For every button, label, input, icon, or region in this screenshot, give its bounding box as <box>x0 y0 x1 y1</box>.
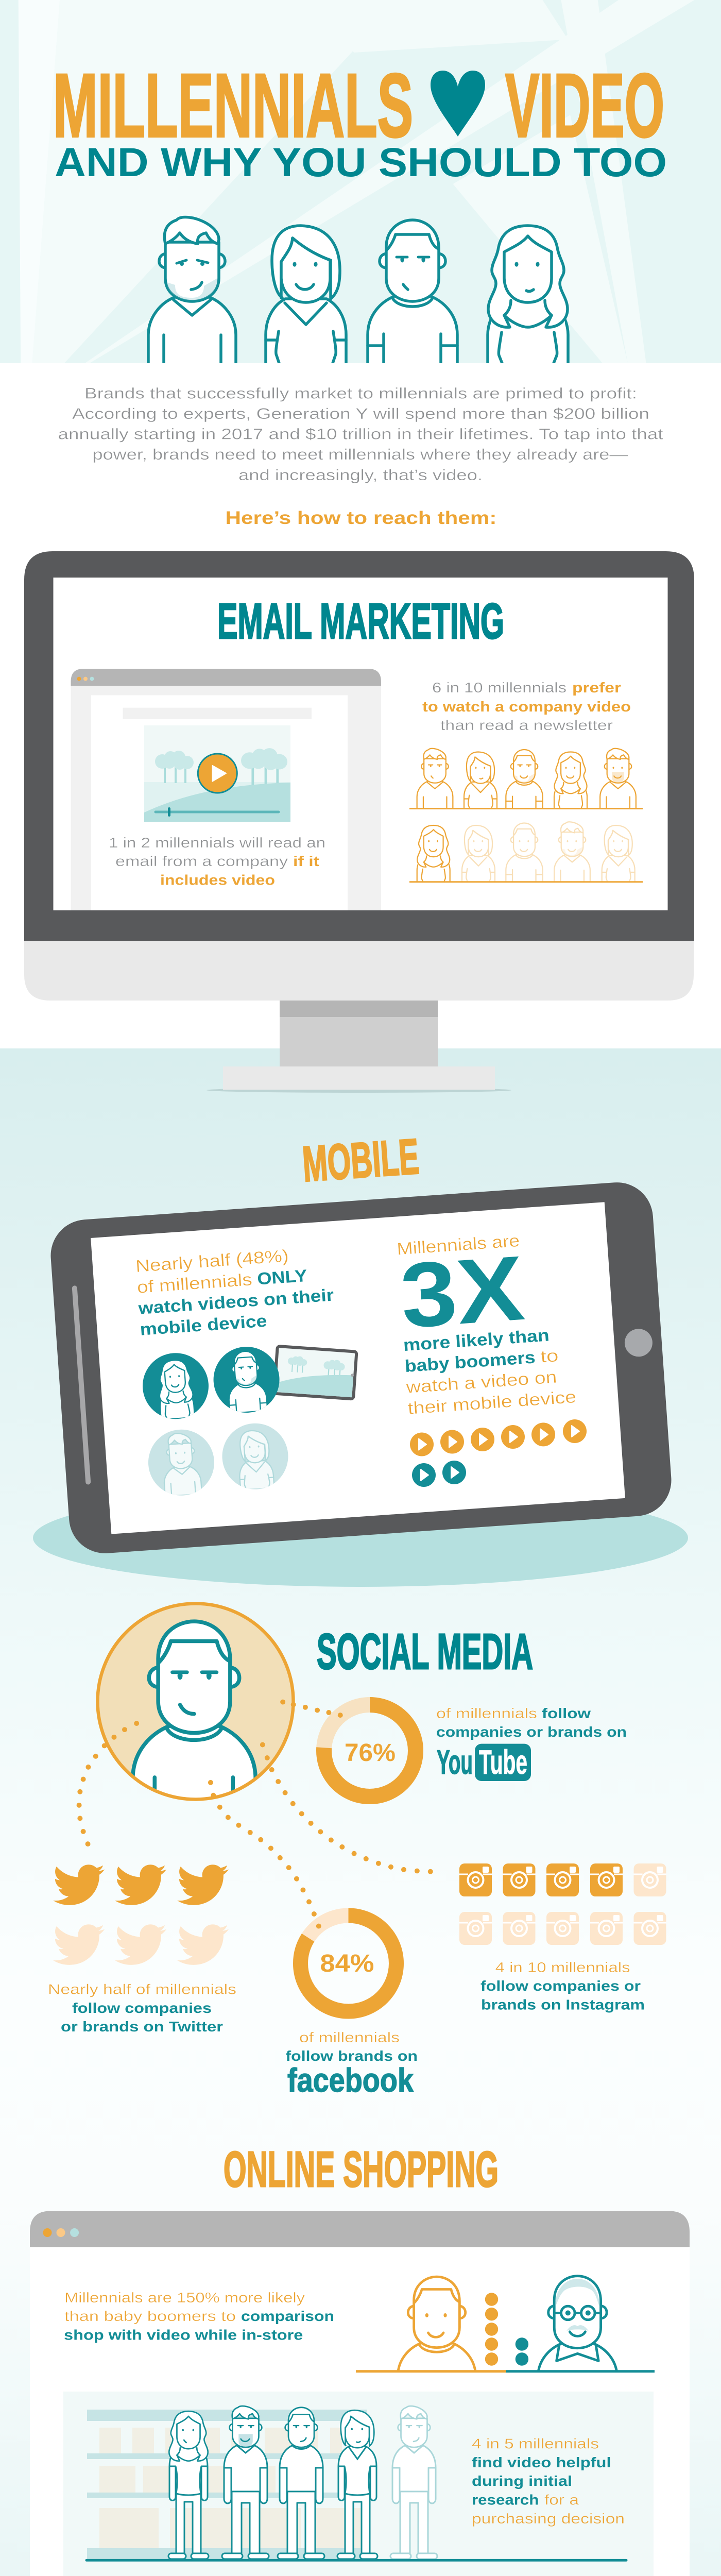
stat: comparison shop in-store: than baby boomers to <box>64 2308 236 2324</box>
stat: 4 in 5 <box>472 2436 625 2527</box>
heading: Social Media: SOCIAL MEDIA <box>317 1623 533 1680</box>
stat: 4 in 5: for a <box>544 2492 579 2508</box>
stat: 1 in 2: email from a company <box>115 853 288 869</box>
stat: comparison shop in-store <box>64 2290 334 2343</box>
header background with light rays <box>0 0 721 363</box>
panel: tablet mobile <box>48 1180 674 1556</box>
millennial circles <box>140 1344 290 1498</box>
icon: heart <box>431 71 485 137</box>
stat: Twitter: Nearly half of millennials <box>48 1981 236 1997</box>
donut chart: 84% <box>301 1916 397 2011</box>
stat: Twitter <box>48 1981 236 2035</box>
donut chart: 84%: 84% <box>320 1950 374 1977</box>
stat: Instagram: brands on Instagram <box>481 1997 645 2012</box>
shelf boxes <box>99 2428 361 2548</box>
small tablet video <box>274 1346 356 1399</box>
stat: 6 in 10: 6 in 10 millennials <box>432 680 566 696</box>
people rows: 6 of 10 <box>409 749 643 882</box>
browser window email mock <box>71 669 381 910</box>
monitor screen <box>54 578 667 910</box>
stat: YouTube: of millennials <box>436 1705 537 1721</box>
title: Millennials love video: MILLENNIALS <box>53 56 413 156</box>
stat: nearly half: of millennials <box>136 1269 253 1297</box>
stat: 3X: more likely than <box>403 1325 550 1354</box>
stat: 1 in 2: if it <box>293 853 319 869</box>
stat: YouTube <box>436 1705 627 1781</box>
logo: YouTube: You <box>437 1743 473 1781</box>
stat: 4 in 5: during initial <box>472 2473 572 2489</box>
tablet frame <box>48 1180 674 1556</box>
icon: millennial vs boomer comparison <box>356 2275 655 2373</box>
stat: 3X: watch a video on <box>405 1367 557 1397</box>
stat: nearly half: Nearly half (48%) <box>135 1246 289 1276</box>
play icons: 3X row <box>410 1419 587 1487</box>
subtitle: AND WHY YOU SHOULD TOO <box>55 139 667 185</box>
heading: Email Marketing: EMAIL MARKETING <box>217 593 504 649</box>
stat: 6 in 10: prefer <box>572 680 621 696</box>
stat: 1 in 2 <box>109 835 325 888</box>
stat: Instagram: 4 in 10 millennials <box>495 1959 630 1975</box>
stat: comparison shop in-store: Millennials are 150% more likely <box>64 2290 305 2306</box>
stat: 4 in 5: find video helpful <box>472 2454 611 2470</box>
shelves <box>87 2410 367 2560</box>
video thumbnail <box>144 725 290 822</box>
intro paragraph: and increasingly, that’s video. <box>238 467 483 484</box>
stat: 3X: Millennials are <box>396 1231 520 1259</box>
logo: YouTube <box>437 1743 531 1781</box>
stat: Instagram <box>480 1959 645 2012</box>
stat: 3X: baby boomers <box>404 1347 536 1376</box>
stat: nearly half: ONLY <box>256 1266 308 1289</box>
stat: YouTube: follow <box>542 1705 591 1721</box>
tablet screen <box>91 1202 625 1534</box>
icons: Instagram <box>459 1863 666 1945</box>
lead-in heading: Here’s how to reach them: <box>226 508 496 528</box>
donut chart: 76%: 76% <box>345 1739 396 1767</box>
stat: Facebook: of millennials <box>299 2029 400 2045</box>
stat: nearly half: mobile device <box>139 1311 267 1339</box>
store shelf panel <box>63 2392 654 2576</box>
white cover below header <box>0 363 721 1048</box>
stat: 4 in 5: research <box>472 2492 539 2508</box>
heading: Mobile: MOBILE <box>301 1128 421 1192</box>
panel: online shopping browser window <box>30 2211 690 2576</box>
stat: nearly half <box>134 1243 336 1339</box>
stat: 6 in 10: to watch a company video <box>422 699 631 715</box>
icons: Twitter birds <box>53 1865 229 1965</box>
stat: comparison shop in-store: comparison <box>241 2308 334 2324</box>
four millennials illustration <box>148 217 568 363</box>
standing millennials <box>168 2406 437 2559</box>
panel: desktop monitor email marketing <box>24 551 694 1093</box>
stat: Instagram: follow companies or <box>480 1978 641 1994</box>
logo: YouTube: Tube <box>479 1743 527 1781</box>
intro paragraph: power, brands need to meet millennials where they already are— <box>93 446 628 463</box>
intro paragraph: According to experts, Generation Y will spend more than $200 billion <box>72 405 649 422</box>
stat: YouTube: companies or brands on <box>436 1724 627 1740</box>
monitor stand <box>207 1001 511 1093</box>
stat: 4 in 5: 4 in 5 millennials <box>472 2436 599 2451</box>
stat: nearly half: watch videos on their <box>137 1285 334 1318</box>
stat: 3X: to <box>540 1346 559 1366</box>
monitor chin <box>24 941 694 1001</box>
ellipse under tablet <box>33 1489 688 1587</box>
stat: 4 in 5: purchasing decision <box>472 2511 625 2527</box>
teal gradient background band <box>0 1048 721 2576</box>
stat: 3X <box>396 1228 577 1418</box>
intro paragraph: Brands that successfully market to millennials are primed to profit: <box>84 385 637 402</box>
stat: comparison shop in-store: shop with video while in-store <box>64 2327 303 2343</box>
stat: 3X: 3X <box>398 1236 527 1347</box>
donut chart: 76% <box>324 1705 416 1797</box>
logo: facebook: facebook <box>287 2061 414 2099</box>
stat: Twitter: follow companies <box>72 2000 212 2016</box>
stat: 6 in 10 <box>422 680 631 733</box>
intro paragraph: annually starting in 2017 and $10 trillion in their lifetimes. To tap into that <box>58 426 663 443</box>
stat: 1 in 2: 1 in 2 millennials will read an <box>109 835 325 851</box>
intro paragraph <box>58 385 663 484</box>
stat: 1 in 2: includes video <box>160 872 275 888</box>
stat: Facebook <box>285 2029 418 2099</box>
dotted connectors <box>77 1700 433 1929</box>
stat: 6 in 10: than read a newsletter <box>440 717 613 733</box>
stat: 3X: their mobile device <box>407 1387 577 1418</box>
stat: Twitter: or brands on Twitter <box>61 2019 223 2035</box>
monitor frame <box>24 551 694 941</box>
stat: Facebook: follow brands on <box>285 2048 418 2064</box>
social person circle <box>98 1603 294 1818</box>
heading: Online Shopping: ONLINE SHOPPING <box>224 2141 499 2197</box>
